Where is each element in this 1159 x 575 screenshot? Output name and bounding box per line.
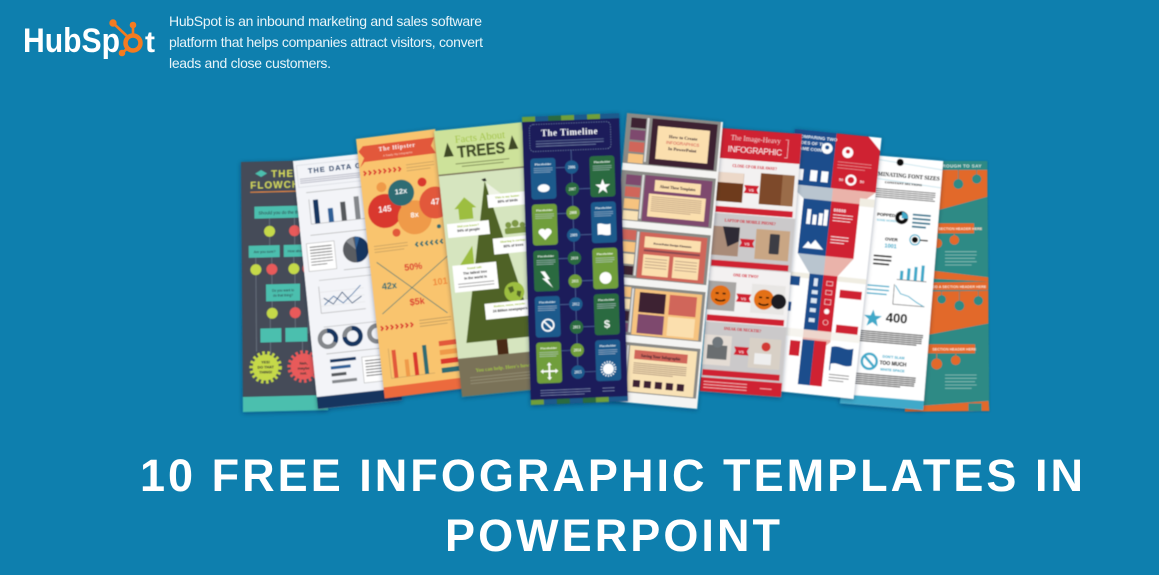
cross stats: 42x	[381, 280, 397, 292]
panel: image-heavy template: INFOGRAPHIC	[727, 144, 783, 158]
left cards: Placeholder	[536, 208, 553, 213]
panel: section header template: SECTION HEADER HERE	[938, 227, 983, 231]
bar block	[798, 198, 832, 256]
section: one or two: VS	[741, 296, 747, 301]
right cards	[589, 155, 621, 381]
panel: data geek template	[293, 152, 404, 409]
icon: red flag	[788, 340, 800, 367]
icon: target	[910, 234, 928, 246]
section: close-up: CLOSE-UP OR FAR AWAY?	[732, 164, 777, 171]
heading: flowchart: THE	[271, 169, 294, 180]
section: laptop or phone: VS	[744, 241, 750, 246]
year nodes: 2012	[572, 302, 580, 307]
icon column	[804, 274, 824, 331]
year nodes: 2010	[571, 256, 578, 261]
section backgrounds	[710, 213, 795, 273]
icons: small trees	[442, 135, 518, 157]
panel: font sizes template: CONSTANT SECTIONS	[885, 180, 922, 187]
company description: leads and close customers.	[169, 55, 331, 71]
icon: globe	[503, 281, 525, 303]
chart: column bars	[388, 343, 435, 378]
heading: trees	[454, 130, 507, 162]
chart: line	[319, 282, 366, 313]
heading: font sizes: ELIMINATING FONT SIZES	[868, 171, 941, 183]
HubSpot logo: HubSp	[23, 22, 120, 60]
panel: red and blue comparison template: 50	[839, 177, 844, 182]
footer text: You can help. Here's how:	[475, 364, 532, 374]
burst: yes: YES!	[261, 360, 270, 365]
charts: donuts	[319, 325, 386, 348]
icon: blue flag	[829, 346, 853, 372]
section: sneak or necktie: SNEAK OR NECKTIE?	[724, 327, 762, 333]
burst: yes: THING!	[259, 370, 272, 375]
panel: image-heavy template: The Image-Heavy	[731, 134, 782, 146]
year nodes: 2015	[574, 370, 582, 375]
year nodes: 2008	[569, 211, 577, 215]
panel: section header template: ADD A SECTION HEADER HERE	[930, 285, 987, 289]
callouts: Sharing is caring:	[500, 237, 526, 244]
panel: font sizes template: WHITE SPACE	[880, 367, 905, 373]
cross stats: 50%	[404, 261, 423, 273]
panel: font sizes template: 400	[885, 310, 908, 326]
chart: horizontal bars	[330, 357, 358, 383]
section: laptop or phone: LAPTOP OR MOBILE PHONE?	[724, 218, 776, 226]
bubble chart: 8x	[410, 210, 420, 220]
panel: font sizes template: OVER	[885, 236, 899, 242]
panel: flowchart template: do that thing?	[273, 293, 293, 298]
panel: font sizes template: SOME WORDS	[876, 218, 898, 223]
icon: no sign	[861, 353, 877, 369]
panel: font sizes template: DON'T SLAM	[882, 354, 905, 360]
callouts: 24 Billion newspapers	[493, 306, 528, 314]
callouts: 80% of birds	[498, 198, 518, 204]
icons: timeline cards: $	[604, 319, 610, 331]
panel: font sizes template: POPPED	[877, 212, 895, 218]
blue and red headers	[789, 129, 837, 188]
left cards: Placeholder	[537, 254, 555, 259]
panel: flowchart template	[241, 160, 328, 412]
slide row 5	[602, 340, 700, 399]
section: sneak or necktie: VS	[738, 349, 744, 354]
slide row 1: INFOGRAPHICS	[666, 140, 700, 148]
right cards: Placeholder	[595, 206, 612, 210]
panel: flowchart template: Should you do the thing?	[258, 209, 308, 216]
bottom columns	[798, 339, 815, 385]
left cards	[530, 158, 562, 384]
striped borders	[522, 113, 628, 405]
section: close-up	[714, 163, 796, 218]
burst: no	[289, 352, 318, 381]
year nodes: 2013	[573, 325, 580, 330]
callouts	[444, 191, 542, 323]
heading: flowchart	[250, 168, 324, 192]
chart: donut	[897, 213, 907, 223]
right cards: Placeholder	[596, 252, 614, 256]
chevrons	[364, 167, 401, 176]
footer	[700, 377, 782, 397]
callouts: Did you know?	[457, 223, 480, 229]
heading: flowchart: FLOWCHART	[250, 179, 324, 192]
slide row 4	[607, 283, 706, 342]
right cards: Placeholder	[599, 344, 617, 348]
connectors	[555, 149, 596, 374]
panel: flowchart template: Do you want to	[272, 288, 294, 293]
heading: the timeline: The Timeline	[541, 126, 598, 138]
ribbon heading	[358, 137, 436, 168]
panel: timeline template	[522, 113, 628, 405]
footer text	[540, 388, 615, 396]
year nodes: 2014	[574, 348, 581, 353]
icons: people	[821, 142, 854, 159]
heading: trees: Facts About	[454, 130, 506, 146]
cross stats	[377, 253, 454, 321]
callouts: in the world is	[464, 275, 487, 281]
panel: font sizes template	[840, 154, 943, 410]
text box	[306, 241, 337, 272]
slide row 2: About These Templates	[660, 185, 696, 192]
year nodes: 2011	[572, 279, 579, 284]
section: one or two	[706, 271, 788, 326]
section: sneak or necktie	[701, 325, 783, 381]
icon: star	[863, 309, 882, 327]
slide row 5: Saving Your Infographic	[641, 354, 681, 362]
callouts: Reduce, reuse, recycle:	[493, 301, 526, 308]
panel: section header template: SECTION HEADER HERE	[932, 348, 977, 352]
HubSpot logo: t	[145, 26, 155, 59]
panel: red and blue comparison template: 50	[860, 179, 865, 185]
panel: font sizes template: TOO MUCH	[879, 360, 907, 368]
panel: hipster template	[356, 128, 472, 398]
company description	[169, 13, 483, 71]
slide row 1: How to Create	[669, 134, 698, 142]
title	[140, 450, 1083, 561]
slide row 1	[622, 113, 721, 172]
section: close-up: VS	[748, 187, 754, 193]
left cards: Placeholder	[535, 162, 552, 167]
burst: yes: DO THAT	[257, 365, 275, 370]
icon: binder hole	[896, 159, 904, 166]
cross stats: 101	[432, 276, 448, 287]
year nodes	[565, 160, 585, 379]
year nodes: 2009	[570, 233, 578, 238]
heading: the timeline	[529, 121, 611, 152]
burst: no: not.	[300, 371, 307, 376]
panel: section header template: ROUGH TO SAY	[942, 164, 982, 169]
slide row 1: In PowerPoint	[668, 146, 697, 154]
chart: blue bars	[900, 264, 925, 282]
panel: red and blue comparison template: SIDES OF THE	[796, 139, 829, 148]
chart: column bars	[309, 194, 366, 224]
panel: trees template	[434, 122, 550, 397]
year nodes: 2007	[569, 187, 576, 192]
callouts: The tallest tree	[463, 269, 487, 276]
ribbon heading: A Totally Hip Infographic	[383, 150, 413, 158]
illustration: large tree	[449, 175, 538, 358]
title: 10 FREE INFOGRAPHIC TEMPLATES IN	[140, 450, 1083, 501]
year nodes: 2006	[568, 165, 575, 170]
chevrons	[381, 322, 413, 331]
burst: yes	[251, 353, 280, 382]
company description: platform that helps companies attract visitors, convert	[169, 34, 483, 50]
cross stats: $5k	[409, 296, 425, 308]
bubble chart: 12x	[394, 186, 408, 197]
panel: flowchart template: Are you sure?	[254, 250, 276, 254]
heading: trees: TREES	[456, 139, 506, 162]
bubble chart: 145	[378, 204, 393, 215]
ribbon legend	[439, 339, 460, 373]
teal chevrons	[416, 239, 443, 247]
left cards: Placeholder	[540, 346, 558, 351]
panel: flowchart template: How about?	[288, 249, 306, 253]
panel: red and blue comparison template: 88888	[833, 208, 847, 214]
icon: house	[453, 196, 477, 220]
chart: trend line	[893, 284, 926, 307]
chart: pie	[342, 235, 370, 264]
left cards: Placeholder	[539, 300, 556, 305]
section: laptop or phone	[710, 218, 792, 271]
callouts: 80% of trees	[503, 243, 524, 249]
icon: set square	[454, 246, 475, 270]
slide row 3: PowerPoint Design Elements	[653, 242, 693, 249]
callouts: 94% of people	[457, 227, 480, 233]
company description: HubSpot is an inbound marketing and sales software	[169, 13, 482, 29]
right cards: Placeholder	[598, 298, 615, 302]
icon: sprocket	[110, 20, 140, 56]
heading: data geek: THE DATA GEEK	[308, 159, 380, 175]
bubble chart	[365, 174, 454, 240]
burst: no: Nah,	[299, 361, 308, 366]
panel: red and blue comparison template	[767, 129, 882, 399]
callouts: This is my home:	[495, 193, 520, 200]
section: one or two: ONE OR TWO?	[733, 273, 759, 279]
ribbon heading: The Hipster	[378, 143, 416, 153]
panel: red and blue comparison template: SAME COIN	[796, 145, 823, 153]
title: POWERPOINT	[445, 510, 780, 561]
panel: PowerPoint how-to template	[601, 113, 723, 409]
panel: font sizes template: 1001	[884, 243, 897, 250]
panel: image-heavy template	[700, 128, 802, 397]
icon: people	[504, 219, 527, 234]
funnel sections	[788, 184, 833, 201]
header	[719, 128, 802, 164]
panel: section header template	[905, 161, 989, 412]
bubble chart: 47	[430, 197, 441, 207]
slide row 3	[612, 227, 711, 285]
panel: red and blue comparison template: COMPARING TWO	[797, 133, 838, 142]
flow box	[254, 205, 321, 219]
burst: no: maybe	[298, 366, 310, 371]
slide row 2	[617, 170, 716, 228]
icons: timeline cards	[535, 179, 616, 381]
callouts: Stand tall:	[467, 265, 482, 270]
right cards: Placeholder	[594, 160, 611, 164]
template fan	[241, 113, 989, 412]
